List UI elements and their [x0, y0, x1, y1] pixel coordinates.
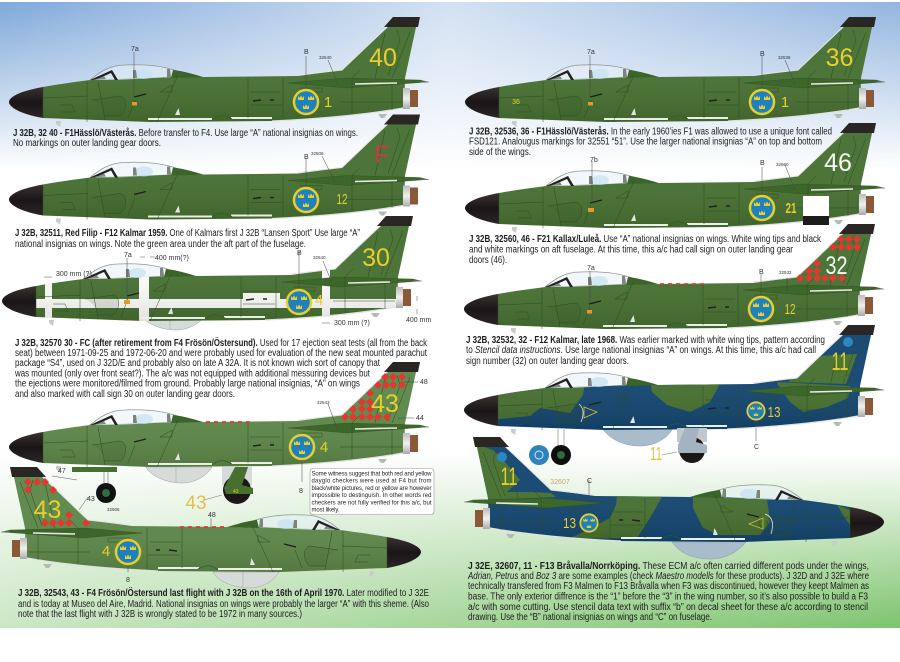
aircraft: J 32B 32560, 46 [465, 123, 885, 233]
aircraft: J 32B 32570 with white ejection test bands: 7a [124, 252, 132, 259]
aircraft: J 32B 32536, 36 [465, 17, 885, 127]
gear and outer doors for J 32E [529, 428, 759, 465]
caption: 32532 [466, 335, 825, 367]
aircraft: J 32B 32543 F4 right-side view: 48 [420, 379, 428, 386]
caption: 32607 [467, 560, 869, 623]
aircraft: J 32E camouflage left-side view, mirrored: 13 [563, 515, 576, 532]
aircraft: J 32B 32532, 32: B [759, 269, 764, 276]
caption: 32543: note that the last flight with J 32B is wrongly stated to be 1972 in many sources.) [18, 609, 302, 620]
aircraft: J 32B 32543 left-side view, mirrored: 8 [126, 577, 130, 584]
aircraft: J 32B 32543 F4 right-side view: 43 [371, 390, 399, 418]
aircraft: J 32B 32543 left-side view, mirrored: 43 [34, 496, 61, 524]
aircraft: J 32B 32511 Red Filip [9, 114, 429, 224]
aircraft: J 32E camouflage right-side view: 13 [768, 404, 780, 421]
aircraft: J 32B 32 40: 1 [324, 94, 332, 111]
aircraft: J 32B 32543 left-side view, mirrored: 48 [208, 512, 216, 519]
caption: 32543: and is today at Museo del Aire, Madrid. National insignias on wings were probably the larger “A” with this sheme. (Also [18, 599, 429, 610]
note box on checkers: dayglo checkers were used at F4 but from [312, 478, 432, 484]
caption: 32560: J 32B, 32560, 46 - F21 Kallax/Luleå. Use “A” national insignias on wings. White wing tips and black [469, 233, 822, 245]
caption: 32536: J 32B, 32536, 36 - F1Hässlö/Västerås. In the early 1960’ies F1 was allowed to use a unique font called [469, 126, 832, 138]
caption: 32570: seat) between 1971-09-25 and 1972-06-20 and were probably used for evaluation of the new seat mounted parachut [15, 348, 427, 359]
caption: 32607: Adrian, Petrus and Boz 3 are some examples (check Maestro modells for these products). J 32D and J 32E where [467, 571, 869, 582]
aircraft: J 32B 32560, 46: 46 [824, 149, 852, 177]
caption: 32560: doors (46). [469, 255, 507, 266]
aircraft: J 32E camouflage left-side view, mirrored [464, 437, 884, 559]
caption: 32607: drawing. Use the “B” national insignias on wings and “C” on fuselage. [468, 612, 712, 623]
aircraft: J 32B 32560, 46: 32560 [776, 162, 789, 167]
caption: 32570: and also marked with call sign 30 on outer landing gear doors. [15, 389, 235, 400]
aircraft: J 32E camouflage right-side view [464, 325, 884, 446]
caption: 32511 [15, 228, 360, 250]
note box on checkers: Some witness suggest that both red and yellow [312, 472, 432, 478]
aircraft: J 32B 32560, 46: B [760, 160, 765, 167]
aircraft: J 32B 32 40 [9, 17, 429, 127]
aircraft: J 32B 32543 F4 right-side view [9, 362, 429, 495]
aircraft: J 32B 32511 Red Filip: B [304, 154, 309, 161]
aircraft: J 32B 32543 F4 right-side view: 32543 [317, 400, 330, 405]
aircraft: J 32E camouflage left-side view, mirrored: 32607 [550, 479, 570, 486]
aircraft: J 32B 32536, 36: 36 [512, 99, 520, 106]
caption: 32570: J 32B, 32570 30 - FC (after retirement from F4 Frösön/Östersund). Used for 17 ejection seat tests (all from the back [15, 336, 428, 349]
aircraft: J 32B 32 40: 40 [369, 44, 397, 72]
aircraft: J 32B 32570 with white ejection test bands: 300 mm (?) [334, 320, 370, 327]
aircraft: J 32B 32536, 36: 36 [826, 44, 853, 72]
caption: 32570 [14, 336, 428, 400]
caption: 32570: package “S4”, used on J 32D/E and probably also on late A 32A. It is not known wich sort of canopy that [15, 358, 380, 369]
aircraft: J 32B 32560, 46: 21 [786, 200, 796, 217]
aircraft: J 32B 32 40: 32540 [319, 55, 332, 60]
aircraft: J 32B 32 40: B [304, 49, 309, 56]
caption: 32570: the ejections were monitored/filmed from ground. Probably large national insignias, “A” on wings [15, 378, 360, 390]
nose gear and outer door details: 43 [87, 496, 95, 503]
aircraft: J 32B 32543 left-side view, mirrored: 4 [102, 543, 110, 560]
gear and outer doors for J 32E: C [754, 444, 759, 451]
caption: 32532: J 32B, 32532, 32 - F12 Kalmar, late 1968. Was earlier marked with white wing tips, pattern according [466, 335, 825, 346]
nose gear and outer door details [52, 467, 253, 514]
aircraft: J 32E camouflage right-side view: 11 [832, 348, 848, 376]
note box on checkers: impossible to destinguish. In other words red [312, 493, 432, 499]
aircraft: J 32B 32543 left-side view, mirrored [1, 467, 421, 588]
aircraft: J 32B 32570 with white ejection test bands: 400 mm [406, 317, 431, 324]
aircraft: J 32B 32532, 32 [464, 224, 884, 334]
aircraft: J 32B 32511 Red Filip: F [374, 141, 390, 169]
aircraft: J 32B 32570 with white ejection test bands: 30 [362, 244, 390, 272]
aircraft: J 32E camouflage left-side view, mirrored: 11 [500, 463, 518, 491]
caption: 32532: to Stencil data instructions. Use large national insignias “A” on wings. At this time, this a/c had call [466, 345, 816, 356]
aircraft: J 32B 32532, 32: 7a [587, 265, 595, 272]
aircraft: J 32B 32570 with white ejection test bands: 400 mm(?) [155, 255, 189, 262]
gear and outer doors for J 32E: 11 [650, 444, 662, 464]
caption: 32536: side of the wings. [469, 147, 531, 158]
caption: 32543: J 32B, 32543, 43 - F4 Frösön/Östersund last flight with J 32B on the 16th of April 1970. Later modified to J 32E [18, 586, 429, 599]
aircraft: J 32B 32570 with white ejection test bands [2, 216, 431, 330]
caption: 32 40: No markings on outer landing gear doors. [13, 138, 161, 149]
aircraft: J 32B 32536, 36: 7a [587, 49, 595, 56]
aircraft: J 32B 32536, 36: B [760, 51, 765, 58]
aircraft: J 32B 32570 with white ejection test bands: B [297, 250, 302, 257]
caption: 32511: national insignias on wings. Note the green area under the aft part of the fuselage. [15, 239, 306, 250]
aircraft: J 32B 32560, 46: 7b [590, 157, 598, 164]
aircraft: J 32B 32532, 32: 12 [784, 301, 796, 318]
caption: 32560: and white markings on aft fuselage. At this time, this a/c had call sign on outer landing gear [469, 244, 794, 256]
aircraft: J 32E camouflage left-side view, mirrored: C [587, 478, 592, 485]
aircraft: J 32B 32 40: 7a [131, 46, 139, 53]
note box on checkers: checkers are not fully verified for this a/c, but [312, 500, 432, 506]
caption: 32560 [469, 233, 822, 266]
aircraft: J 32B 32532, 32: 32532 [779, 270, 792, 275]
caption: 32543 [18, 586, 429, 620]
note box on checkers: most likely. [312, 508, 340, 514]
aircraft: J 32B 32543 F4 right-side view: 44 [416, 415, 424, 422]
note box on checkers: black/white pictures, red or yellow are however [312, 486, 432, 492]
aircraft: J 32B 32543 F4 right-side view: 4 [320, 439, 328, 456]
aircraft: J 32B 32570 with white ejection test bands: 4 [315, 292, 323, 309]
aircraft: J 32B 32511 Red Filip: 12 [336, 191, 348, 208]
aircraft: J 32B 32536, 36: 1 [781, 94, 789, 111]
caption: 32 40 [13, 127, 358, 149]
aircraft: J 32B 32570 with white ejection test bands: 32540 [313, 255, 326, 260]
aircraft: J 32B 32543 F4 right-side view: 8 [299, 488, 303, 495]
nose gear and outer door details: 43 [185, 493, 207, 514]
aircraft: J 32B 32536, 36: 32536 [778, 55, 791, 60]
caption: 32511: J 32B, 32511, Red Filip - F12 Kalmar 1959. One of Kalmars first J 32B “Lansen Sport” Use large “A” [15, 228, 360, 239]
caption: 32607: J 32E, 32607, 11 - F13 Bråvalla/Norrköping. These ECM a/c often carried different pods under the wings, [468, 560, 869, 572]
caption: 32536 [469, 126, 832, 158]
nose gear and outer door details: 47 [58, 468, 66, 475]
nose gear and outer door details: 32606 [107, 507, 120, 512]
caption: 32532: sign number (32) on outer landing gear doors. [466, 356, 629, 367]
note box on checkers [310, 468, 434, 514]
nose gear and outer door details: 43 [233, 489, 239, 495]
caption: 32570: was mounted (only over front seat?). The a/c was not equipped with additional messuring devices but [14, 368, 370, 380]
aircraft: J 32B 32570 with white ejection test bands: 300 mm (?) [56, 271, 92, 278]
aircraft: J 32B 32511 Red Filip: 32506 [311, 151, 324, 156]
aircraft: J 32B 32532, 32: 32 [826, 252, 848, 280]
caption: 32 40: J 32B, 32 40 - F1Hässlö/Västerås. Before transfer to F4. Use large “A” national insignias on wings. [13, 127, 358, 139]
